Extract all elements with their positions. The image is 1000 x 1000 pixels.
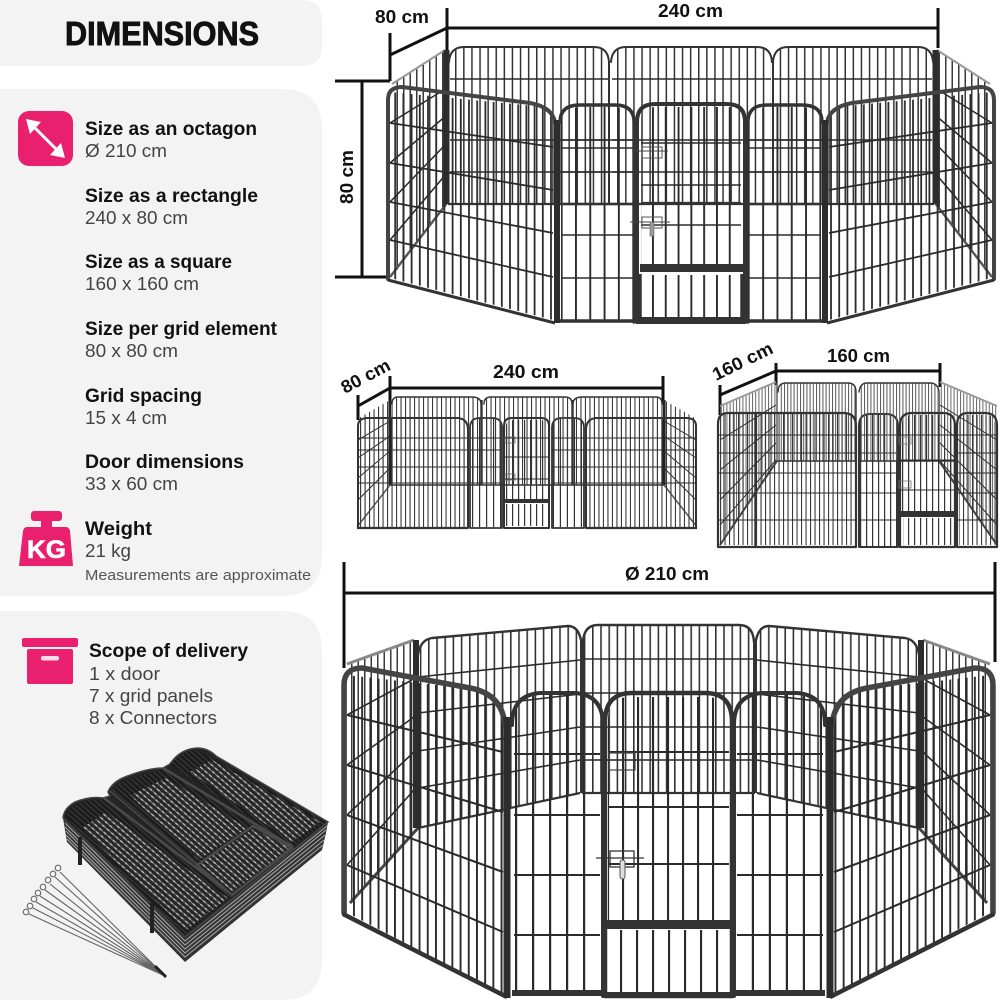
text: scope of delivery list [89,641,248,728]
icon: box [22,638,78,684]
dimension: diameter 210 cm: Ø 210 cm [625,564,709,584]
dimension: 80 cm height: 80 cm [337,150,357,204]
panel: scope of delivery [0,611,322,1000]
spec: size per grid element [85,319,278,361]
spec: size per grid element: 80 x 80 cm [85,341,178,361]
dimension: 80 cm depth [375,7,447,81]
dimension: 160 cm depth: 160 cm [709,338,776,385]
spec: weight [85,519,153,561]
fence: left half [343,626,604,998]
dimension: 80 cm depth: 80 cm [375,7,429,27]
text: scope of delivery list: 8 x Connectors [89,708,217,728]
spec: grid spacing [85,386,202,428]
fence: front right corner panel [957,413,997,547]
fence: right half (back and sides) [858,382,997,545]
dimension: 240 cm width [447,1,938,48]
spec: size as an octagon: Size as an octagon [85,119,257,140]
spec: weight: 21 kg [85,541,131,561]
fence: back centre panel [610,47,772,204]
spec: size as a rectangle: 240 x 80 cm [85,208,188,228]
dimension: diameter 210 cm [344,562,995,668]
text: scope of delivery list: Scope of delivery [89,641,248,662]
spec: size as an octagon [85,119,257,161]
spec: size as a square: Size as a square [85,252,232,273]
text: scope of delivery list: 7 x grid panels [89,686,213,706]
spec: size as a rectangle: Size as a rectangle [85,186,258,207]
dimension: 240 cm width: 240 cm [658,1,723,21]
diagram: square pen [709,338,997,547]
spec: size as an octagon: Ø 210 cm [85,141,167,161]
spec: size as a rectangle [85,186,258,228]
dimension: 160 cm width: 160 cm [827,346,890,366]
fence: door [899,413,955,547]
spec: size per grid element: Size per grid element [85,319,278,340]
panel: measurements [0,89,322,596]
spec: grid spacing: 15 x 4 cm [85,408,167,428]
dimension: 80 cm depth: 80 cm [337,355,394,398]
dimension: 80 cm depth [337,355,394,420]
icon: weight [19,511,73,566]
fence: back centre panel [468,397,586,485]
dimension: 240 cm width [390,362,663,402]
spec: door dimensions [85,452,244,494]
fence: left half [388,47,634,323]
note: measurements are approximate: Measurements are approximate [85,567,311,584]
dimension: 160 cm depth [709,338,776,415]
image: connector pins [23,865,166,977]
spec: size as a square [85,252,232,294]
diagram: octagon pen with dimensions (top) [335,1,994,323]
heading: dimensions: DIMENSIONS [65,15,259,52]
fence: right half [748,47,994,323]
dimension: 240 cm width: 240 cm [493,362,559,382]
spec: door dimensions: 33 x 60 cm [85,474,178,494]
fence: door [630,104,745,322]
text: scope of delivery list: 1 x door [89,664,160,684]
spec: door dimensions: Door dimensions [85,452,244,473]
icon: diagonal size arrow [18,111,73,166]
spec: size as a square: 160 x 160 cm [85,274,199,294]
fence: back centre panel [582,625,755,793]
dimension: 80 cm height [335,81,390,277]
icon: weight: KG [27,536,66,564]
diagram: rectangle pen [337,355,697,528]
panel: title background [0,0,322,66]
spec: grid spacing: Grid spacing [85,386,202,407]
fence: left half [718,382,898,547]
fence: left half [357,397,502,528]
diagram: large octagon pen [343,562,995,998]
image: stacked grid panels [63,748,328,962]
fence: door [596,693,732,997]
fence: right half [552,397,697,528]
spec: weight: Weight [85,519,153,540]
fence: door [504,418,549,528]
fence: right half [733,626,994,998]
dimension: 160 cm width [776,346,940,387]
